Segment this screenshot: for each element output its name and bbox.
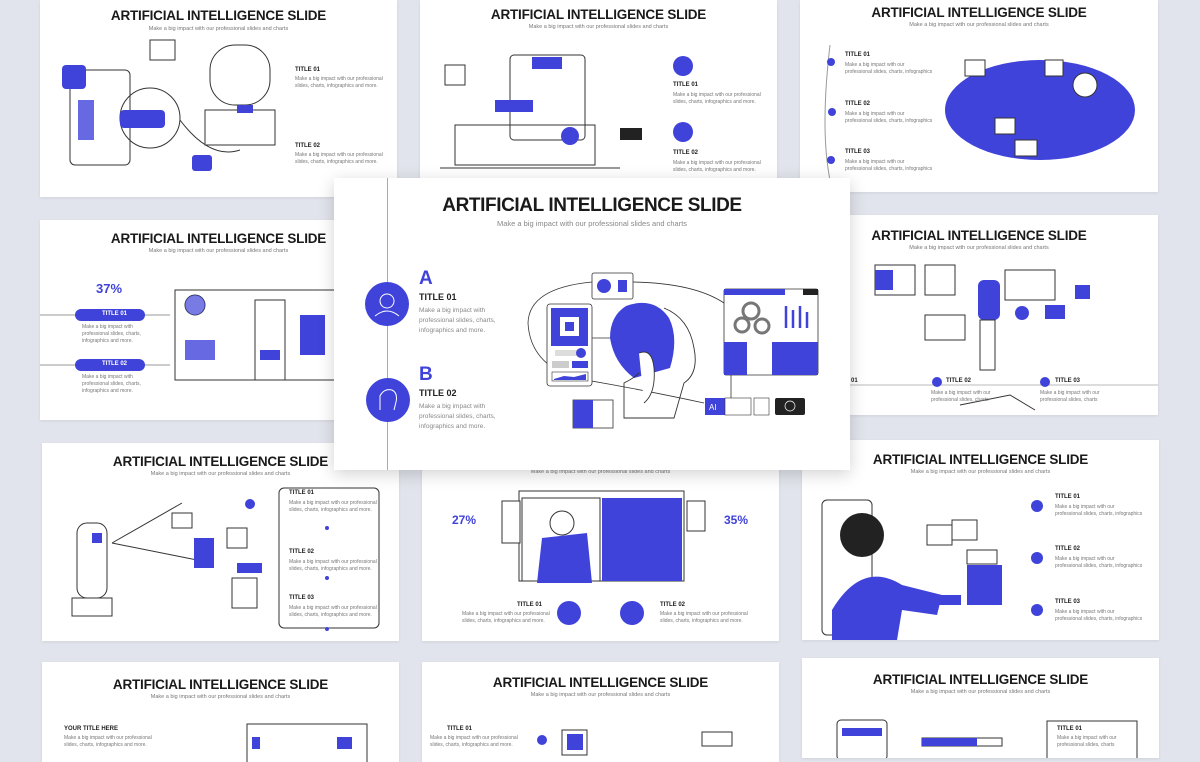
slide r2c1: ARTIFICIAL INTELLIGENCE SLIDE [111, 231, 326, 246]
slide r3c1: slides, charts, infographics and more. [289, 566, 372, 572]
slide r3c1 [42, 443, 399, 641]
slide r3c3: TITLE 01 [1055, 494, 1080, 500]
slide r3c2: 35% [724, 513, 748, 527]
slide r4c1: Make a big impact with our professional slides and charts [151, 694, 290, 700]
block B: Make a big impact with [419, 403, 485, 410]
block A: professional slides, charts, [419, 317, 496, 324]
slide r4c3: professional slides, charts [1057, 742, 1115, 748]
slide r1c2: Make a big impact with our professional [673, 92, 761, 98]
slide r2c1: TITLE 02 [102, 361, 127, 367]
slide r4c1 [42, 662, 399, 762]
bottom right row [705, 398, 725, 415]
slide r3c1: Make a big impact with our professional [289, 500, 377, 506]
slide r3c1: TITLE 03 [289, 595, 314, 601]
slide r4c3: TITLE 01 [1057, 726, 1082, 732]
block A: TITLE 01 [419, 292, 457, 302]
slide r1c2: slides, charts, infographics and more. [673, 99, 756, 105]
bottom left box [573, 400, 613, 428]
slide r1c2: TITLE 02 [673, 150, 698, 156]
slide r1c2: Make a big impact with our professional [673, 160, 761, 166]
slide r1c1: slides, charts, infographics and more. [295, 159, 378, 165]
slide r2c1: infographics and more. [82, 388, 133, 394]
slide r3c1: ARTIFICIAL INTELLIGENCE SLIDE [113, 454, 328, 469]
slide r3c2: Make a big impact with our professional [660, 611, 748, 617]
slide r1c1 [40, 0, 397, 197]
slide r3c2: slides, charts, infographics and more. [462, 618, 545, 624]
slide r1c3: Make a big impact with our [845, 111, 904, 117]
slide r1c1: ARTIFICIAL INTELLIGENCE SLIDE [111, 8, 326, 23]
slide r1c2: Make a big impact with our professional slides and charts [529, 24, 668, 30]
slide r1c3: Make a big impact with our [845, 159, 904, 165]
slide r4c2 [422, 662, 779, 762]
AI illustration: AI [709, 403, 717, 412]
slide r1c2 [420, 0, 777, 190]
slide r1c3: TITLE 03 [845, 149, 870, 155]
slide r2c1: Make a big impact with [82, 374, 133, 380]
slide r4c1: slides, charts, infographics and more. [64, 742, 147, 748]
slide r2c1: professional slides, charts, [82, 381, 141, 387]
block B: B [419, 364, 433, 385]
slide r3c2: Make a big impact with our professional [462, 611, 550, 617]
slide r4c2: TITLE 01 [447, 726, 472, 732]
slide r1c2: TITLE 01 [673, 82, 698, 88]
slide r1c3 [800, 0, 1158, 192]
slide r2c3: 01 [851, 378, 858, 384]
slide r3c3: Make a big impact with our [1055, 556, 1114, 562]
slide r2c3: ARTIFICIAL INTELLIGENCE SLIDE [871, 228, 1087, 243]
slide r4c2: ARTIFICIAL INTELLIGENCE SLIDE [493, 675, 708, 690]
slide r2c3: Make a big impact with our [1040, 390, 1099, 396]
slide r1c3: professional slides, charts, infographics [845, 118, 932, 124]
slide r2c1 [40, 220, 397, 420]
right panel [724, 289, 818, 375]
slide r1c3: professional slides, charts, infographics [845, 69, 932, 75]
slide r4c1: YOUR TITLE HERE [64, 726, 118, 732]
slide r3c1: slides, charts, infographics and more. [289, 507, 372, 513]
slide r1c1: slides, charts, infographics and more. [295, 83, 378, 89]
block B: TITLE 02 [419, 388, 457, 398]
block B [419, 364, 496, 430]
slide r3c2: 27% [452, 513, 476, 527]
AI illustration [528, 272, 818, 428]
slide r2c3: TITLE 03 [1055, 378, 1080, 384]
block A: Make a big impact with [419, 307, 485, 314]
vertical line [387, 178, 388, 470]
slide r1c3: TITLE 01 [845, 52, 870, 58]
slide r2c3: Make a big impact with our professional slides and charts [909, 245, 1049, 251]
slide r3c3: Make a big impact with our [1055, 504, 1114, 510]
slide r1c3: ARTIFICIAL INTELLIGENCE SLIDE [871, 5, 1087, 20]
slide r3c1: TITLE 02 [289, 549, 314, 555]
slide r3c3: professional slides, charts, infographics [1055, 616, 1142, 622]
slide r4c3 [802, 658, 1159, 758]
slide r2c3: TITLE 02 [946, 378, 971, 384]
slide r1c3: Make a big impact with our professional slides and charts [909, 22, 1049, 28]
slide r1c1: Make a big impact with our professional [295, 76, 383, 82]
block A: infographics and more. [419, 327, 485, 334]
slide r4c2: Make a big impact with our professional slides and charts [531, 692, 670, 698]
slide r4c1: Make a big impact with our professional [64, 735, 152, 741]
slide r1c1: Make a big impact with our professional slides and charts [149, 26, 288, 32]
left panel [547, 304, 592, 386]
slide r3c3: TITLE 02 [1055, 546, 1080, 552]
slide r4c3: Make a big impact with our professional slides and charts [911, 689, 1050, 695]
block A [419, 268, 496, 334]
icon B [366, 378, 410, 422]
slide r3c2: TITLE 02 [660, 602, 685, 608]
slide r2c1: professional slides, charts, [82, 331, 141, 337]
slide r3c3 [802, 440, 1159, 640]
slide r2c3 [800, 215, 1158, 415]
head [610, 303, 674, 378]
slide r2c3: professional slides, charts [1040, 397, 1098, 403]
slide r4c2: slides, charts, infographics and more. [430, 742, 513, 748]
slide r4c2: Make a big impact with our professional [430, 735, 518, 741]
slide r3c3: Make a big impact with our professional slides and charts [911, 469, 1050, 475]
slide r4c3: ARTIFICIAL INTELLIGENCE SLIDE [873, 672, 1088, 687]
slide r4c1: ARTIFICIAL INTELLIGENCE SLIDE [113, 677, 328, 692]
slide r3c1: Make a big impact with our professional [289, 605, 377, 611]
slide r3c2: TITLE 01 [517, 602, 542, 608]
block A: A [419, 268, 433, 289]
main title: ARTIFICIAL INTELLIGENCE SLIDE [442, 195, 742, 216]
slide r2c3: Make a big impact with our [931, 390, 990, 396]
slide r2c1: Make a big impact with our professional slides and charts [149, 248, 288, 254]
slide r1c2: ARTIFICIAL INTELLIGENCE SLIDE [491, 7, 706, 22]
slide r3c3: professional slides, charts, infographics [1055, 511, 1142, 517]
slide r1c3: professional slides, charts, infographics [845, 166, 932, 172]
icon A [365, 282, 409, 326]
slide r2c3: professional slides, charts [931, 397, 989, 403]
slide r1c1: Make a big impact with our professional [295, 152, 383, 158]
slide r2c1: infographics and more. [82, 338, 133, 344]
slide r3c3: ARTIFICIAL INTELLIGENCE SLIDE [873, 452, 1088, 467]
slide r1c2: slides, charts, infographics and more. [673, 167, 756, 173]
main slide [334, 178, 850, 470]
slide r1c3: TITLE 02 [845, 101, 870, 107]
block B: professional slides, charts, [419, 413, 496, 420]
slide r1c3: Make a big impact with our [845, 62, 904, 68]
top box [592, 273, 633, 299]
main subtitle: Make a big impact with our professional slides and charts [497, 219, 687, 228]
block B: infographics and more. [419, 423, 485, 430]
slide r1c1: TITLE 02 [295, 143, 320, 149]
slide r3c3: TITLE 03 [1055, 599, 1080, 605]
slide r4c3: Make a big impact with our [1057, 735, 1116, 741]
slide r2c1: Make a big impact with [82, 324, 133, 330]
slide r3c2: slides, charts, infographics and more. [660, 618, 743, 624]
slide r3c3: Make a big impact with our [1055, 609, 1114, 615]
slide r3c1: Make a big impact with our professional [289, 559, 377, 565]
slide r3c2: Make a big impact with our professional slides and charts [531, 469, 670, 475]
slide r2c1: 37% [96, 281, 122, 296]
slide r1c1: TITLE 01 [295, 67, 320, 73]
slide r3c2 [422, 443, 779, 641]
slide r3c1: TITLE 01 [289, 490, 314, 496]
slide r3c1: Make a big impact with our professional slides and charts [151, 471, 290, 477]
slide r3c1: slides, charts, infographics and more. [289, 612, 372, 618]
slide r3c3: professional slides, charts, infographics [1055, 563, 1142, 569]
slide r2c1: TITLE 01 [102, 311, 127, 317]
